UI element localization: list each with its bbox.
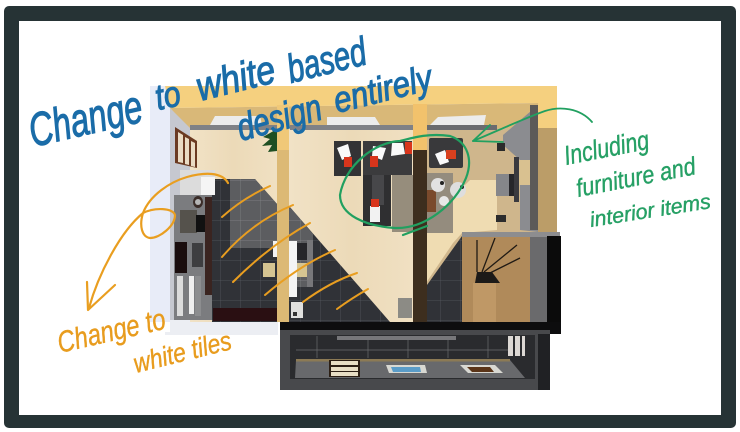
side table in room 2 xyxy=(398,298,412,318)
green circle around furniture xyxy=(340,135,469,235)
heading: design entirely: design xyxy=(232,87,326,150)
heading: change to white based: white xyxy=(192,48,280,110)
brown rug xyxy=(460,365,503,373)
heading: change to white based: based xyxy=(283,29,372,92)
room 2 dark tiles xyxy=(289,206,390,322)
column between rooms 2 and 3 xyxy=(413,104,427,322)
room 3 floor xyxy=(427,128,538,322)
corner sofa xyxy=(334,141,412,226)
heading: design entirely: entirely xyxy=(329,56,438,121)
note: including furniture and interior items xyxy=(561,125,713,232)
appliance xyxy=(291,302,303,318)
orange curved arrow xyxy=(87,174,228,310)
stairs detail xyxy=(329,360,360,377)
floor plan illustration xyxy=(150,86,561,390)
heading: design entirely xyxy=(232,56,438,150)
room 3 sunlit floor xyxy=(426,180,497,283)
heading: change to white based: Change xyxy=(23,79,147,157)
room 2 floor xyxy=(289,128,413,322)
note: change to white tiles xyxy=(54,303,234,379)
window xyxy=(175,127,197,168)
orange hatching over tiles xyxy=(222,186,368,309)
room 1 floor xyxy=(190,128,277,322)
right outer column xyxy=(538,128,557,234)
bottom cabinet xyxy=(213,308,277,321)
cushions xyxy=(337,142,412,222)
room 1 dark tiles xyxy=(212,179,277,322)
bottom left ledge xyxy=(165,320,278,335)
staircase xyxy=(462,232,561,324)
round stools xyxy=(431,178,466,206)
green arrow xyxy=(473,109,592,142)
lower windows xyxy=(508,336,513,356)
inner top wall xyxy=(170,103,538,130)
left exterior wall xyxy=(150,86,170,322)
dining table xyxy=(263,240,313,297)
top roof band xyxy=(165,86,557,128)
column between rooms 1 and 2 xyxy=(277,105,289,322)
note: change to white tiles: Change to xyxy=(54,303,169,360)
note: including furniture and interior items: furniture and xyxy=(574,152,699,203)
kitchen counter xyxy=(174,170,215,320)
blue rug xyxy=(386,365,427,373)
lower level section xyxy=(280,322,561,390)
note: including furniture and interior items: interior items xyxy=(588,190,713,232)
heading: change to white based: to xyxy=(151,73,184,118)
rug under sofa xyxy=(392,175,413,232)
left inner wall xyxy=(170,108,190,320)
right wall unit xyxy=(496,105,538,232)
note: including furniture and interior items: Including xyxy=(561,125,652,171)
window valance strips xyxy=(190,115,497,130)
room 3 dark tiles xyxy=(427,236,470,322)
armchair xyxy=(429,138,463,168)
plant xyxy=(262,129,277,152)
note: change to white tiles: white tiles xyxy=(130,326,234,379)
heading: change to white based xyxy=(23,29,372,157)
coffee table xyxy=(427,190,436,212)
